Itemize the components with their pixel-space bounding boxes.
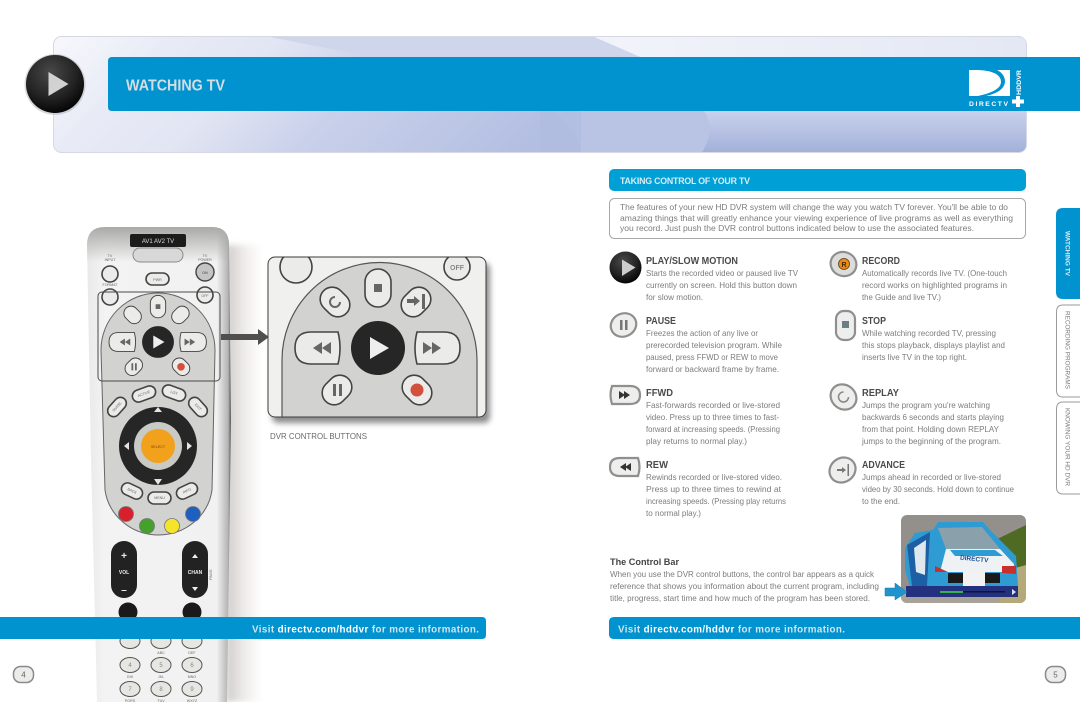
panel: DVR control buttons detail: OFF: [450, 265, 465, 272]
top buttons: INPUT: [105, 258, 116, 262]
volume and channel rockers: +: [121, 551, 127, 562]
feature: ffwd: video. Press up to three times to fast-: [646, 412, 779, 422]
intro text box: you record. Just push the DVR control buttons indicated below to use the associated features.: [620, 223, 974, 233]
feature: rew: increasing speeds. (Pressing play returns: [646, 496, 786, 506]
remote DVR cluster: [109, 295, 206, 378]
logo: DIRECTV HD DVR: HDDVR: [1016, 70, 1023, 95]
volume and channel rockers: VOL: [119, 570, 129, 576]
back, menu, info buttons: BACK: [127, 487, 138, 495]
feature: rew: [610, 458, 786, 518]
feature: replay: [825, 379, 1004, 446]
top buttons: PWR: [153, 278, 162, 282]
number keypad: GHI: [127, 675, 133, 679]
caption: DVR CONTROL BUTTONS: [270, 431, 367, 441]
feature: stop: STOP: [862, 316, 886, 327]
feature: replay: REPLAY: [862, 388, 899, 399]
feature: rew: Press up to three times to rewind at: [646, 484, 782, 494]
top buttons: ON: [202, 271, 208, 275]
feature: play/slow motion: Starts the recorded video or paused live TV: [646, 268, 798, 278]
feature: play/slow motion: [610, 252, 798, 302]
top buttons: TV: [108, 254, 113, 258]
tab: recording programs: [1056, 305, 1080, 397]
top buttons: TV: [203, 254, 208, 258]
tab: knowing your hd dvr: [1056, 402, 1080, 494]
feature: replay: Jumps the program you're watching: [862, 400, 990, 410]
remote slider: [133, 248, 183, 262]
page number 5: [1046, 666, 1066, 682]
feature: stop: inserts live TV in the top right.: [862, 352, 967, 362]
top buttons: POWER: [198, 258, 212, 262]
icon: advance: [825, 452, 860, 488]
feature: record: [827, 248, 1007, 302]
page number 4: 4: [21, 670, 26, 680]
feature: stop: this stops playback, displays playlist and: [862, 340, 1005, 350]
feature: record: record works on highlighted programs in: [862, 280, 1007, 290]
footer bar right: [609, 617, 1080, 639]
tab: watching tv: [1056, 208, 1080, 299]
feature: rew: Rewinds recorded or live-stored video.: [646, 472, 782, 482]
number keypad: ABC: [157, 651, 165, 655]
feature: advance: video by 30 seconds. Hold down to continue: [862, 484, 1014, 494]
feature: play/slow motion: PLAY/SLOW MOTION: [646, 256, 738, 267]
page number 4: [14, 666, 34, 682]
arrow: remote to detail: [221, 329, 269, 345]
tab: recording programs: RECORDING PROGRAMS: [1064, 311, 1070, 390]
feature: record: Automatically records live TV. (One-touch: [862, 268, 1007, 278]
feature: replay: from that point. Holding down REPLAY: [862, 424, 999, 434]
feature: rew: to normal play.): [646, 508, 701, 518]
navigation buttons: ACTIVE: [137, 390, 151, 398]
feature: play/slow motion: for slow motion.: [646, 292, 703, 302]
number keypad: 5: [159, 663, 163, 669]
footer bar right: Visit directv.com/hddvr for more information.: [618, 624, 845, 636]
footer bar left: [0, 617, 486, 639]
highlight rectangle: [98, 292, 220, 381]
feature: pause: PAUSE: [646, 316, 676, 327]
icon: play: [610, 252, 642, 284]
logo: DIRECTV HD DVR: DIRECTV: [969, 101, 1008, 108]
colored buttons: [118, 506, 200, 534]
number keypad: JKL: [158, 675, 164, 679]
icon: large play button: [24, 54, 86, 115]
text block: the control bar: [610, 557, 879, 603]
number keypad: 8: [159, 687, 163, 693]
icon: record: R: [841, 262, 847, 269]
back, menu, info buttons: [119, 481, 200, 504]
icon: replay: [825, 379, 862, 415]
arrow: blue pointer to control bar: [885, 583, 907, 600]
header panel: [54, 36, 1026, 152]
remote display: [130, 234, 186, 247]
feature: pause: prerecorded television program. While: [646, 340, 782, 350]
intro text box: The features of your new HD DVR system will change the way you watch TV forever. You'll be able to do: [620, 202, 1008, 212]
section heading bar: TAKING CONTROL OF YOUR TV: [620, 176, 750, 186]
photo: race car with control bar: DIRECTV: [960, 555, 989, 565]
volume and channel rockers: –: [121, 585, 127, 596]
number keypad: 4: [128, 663, 132, 669]
feature: pause: forward or backward frame by frame.: [646, 364, 779, 374]
text block: the control bar: title, progress, start time and how much of the program has been stored.: [610, 593, 870, 603]
feature: stop: While watching recorded TV, pressing: [862, 328, 996, 338]
intro text box: amazing things that will greatly enhance your viewing experience of live programs as well as everything: [620, 213, 1013, 223]
tab: watching tv: WATCHING TV: [1064, 231, 1070, 277]
text block: the control bar: The Control Bar: [610, 557, 679, 568]
text block: the control bar: reference that shows you information about the current program, including: [610, 581, 879, 591]
feature: advance: ADVANCE: [862, 460, 905, 471]
panel: DVR control buttons detail: [268, 251, 490, 423]
title: WATCHING TV: [126, 78, 226, 94]
feature: ffwd: FFWD: [646, 388, 673, 399]
back, menu, info buttons: INFO: [182, 487, 192, 495]
icon: record: [827, 248, 860, 280]
title band: [108, 57, 1080, 111]
navigation buttons: SELECT: [151, 445, 166, 449]
feature: pause: paused, press FFWD or REW to move: [646, 352, 778, 362]
feature: replay: jumps to the beginning of the program.: [861, 436, 1001, 446]
feature: play/slow motion: currently on screen. Hold this button down: [646, 280, 797, 290]
feature: rew: REW: [646, 460, 669, 471]
feature: replay: backwards 6 seconds and starts playing: [862, 412, 1004, 422]
page number 5: 5: [1053, 670, 1058, 680]
feature: ffwd: Fast-forwards recorded or live-stored: [646, 400, 780, 410]
feature: ffwd: [610, 386, 780, 446]
number keypad: 9: [190, 687, 194, 693]
photo: race car with control bar: [901, 515, 1026, 603]
feature: pause: Freezes the action of any live or: [646, 328, 758, 338]
number keypad: 6: [190, 663, 194, 669]
navigation buttons: LIST: [170, 390, 179, 396]
icon: pause: [607, 309, 640, 341]
navigation buttons: [105, 383, 210, 485]
number keypad: MNO: [188, 675, 196, 679]
back, menu, info buttons: MENU: [154, 496, 165, 500]
volume and channel rockers: PAGE: [208, 569, 213, 580]
intro text box: [610, 198, 1026, 238]
tab: knowing your hd dvr: KNOWING YOUR HD DVR: [1064, 408, 1070, 486]
number keypad: DEF: [188, 651, 196, 655]
navigation buttons: GUIDE: [112, 401, 123, 413]
remote shadow: [226, 245, 262, 702]
section heading bar: [609, 169, 1026, 191]
icon: fast forward: [610, 386, 640, 404]
volume and channel rockers: CHAN: [188, 570, 203, 576]
feature: advance: [825, 452, 1014, 506]
feature: record: the Guide and live TV.): [862, 292, 941, 302]
feature: advance: Jumps ahead in recorded or live-stored: [862, 472, 1001, 482]
remote display: AV1 AV2 TV: [142, 239, 174, 245]
remote control: [87, 227, 231, 702]
logo: DIRECTV HD DVR: [969, 70, 1024, 108]
text block: the control bar: When you use the DVR control buttons, the control bar appears as a quick: [610, 569, 875, 579]
top buttons: OFF: [201, 294, 209, 298]
number keypad: 7: [128, 687, 132, 693]
remote button dome: [101, 293, 215, 535]
icon: rewind: [610, 458, 640, 476]
number keypad: [120, 634, 202, 702]
top buttons: FORMAT: [103, 283, 118, 287]
top buttons: [102, 254, 214, 305]
icon: stop: [836, 311, 855, 340]
feature: ffwd: forward at increasing speeds. (Pressing: [646, 424, 780, 434]
navigation buttons: EXIT: [194, 403, 203, 412]
feature: advance: to the end.: [862, 496, 900, 506]
volume and channel rockers: [111, 541, 213, 622]
feature: stop: [836, 311, 1005, 362]
footer bar left: Visit directv.com/hddvr for more information.: [252, 624, 479, 636]
feature: record: RECORD: [862, 256, 900, 267]
feature: ffwd: play returns to normal play.): [646, 436, 747, 446]
feature: pause: [607, 309, 782, 374]
